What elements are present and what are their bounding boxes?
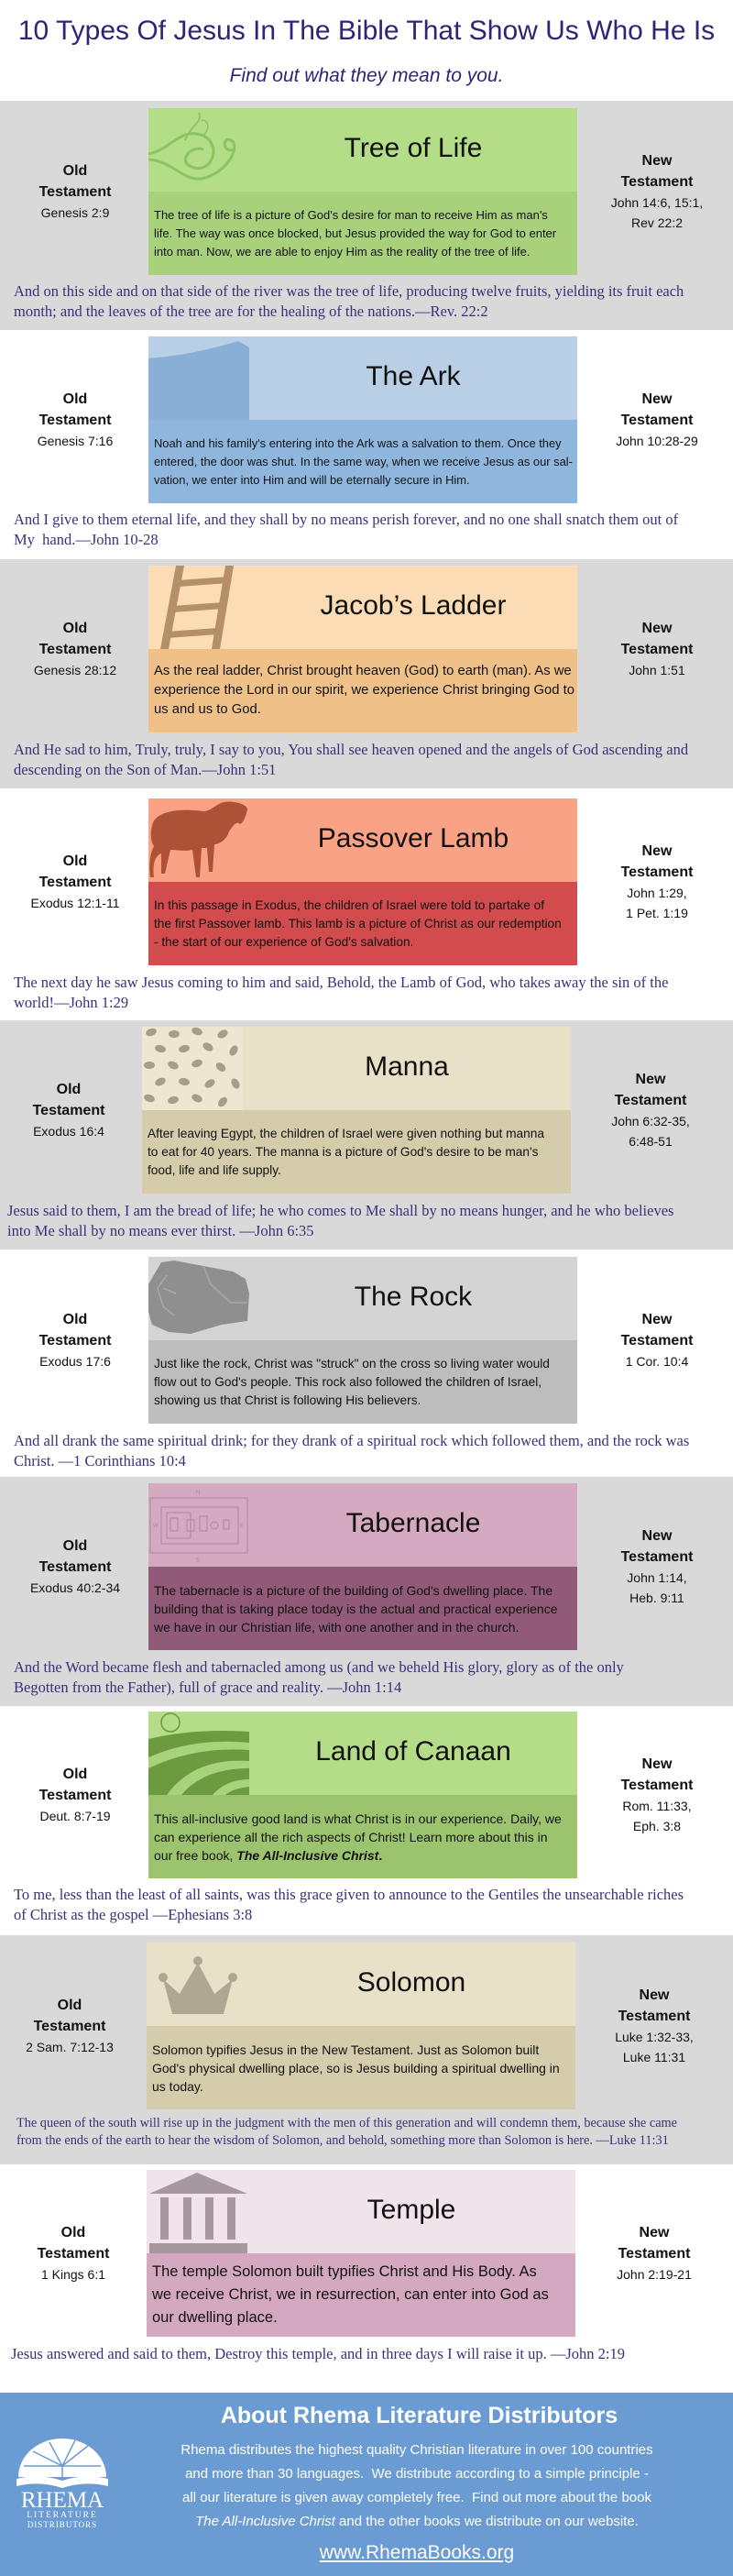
old testament label [38,391,113,448]
quote: Christ. —1 Corinthians 10:4 [14,1452,186,1470]
quote [14,282,684,320]
old testament label: Deut. 8:7-19 [39,1809,111,1823]
card: temple: our dwelling place. [152,2309,278,2326]
card: the rock: showing us that Christ is following His believers. [154,1393,421,1406]
card: the rock: flow out to God's people. This rock also followed the children of Israel, [154,1375,542,1388]
footer body text: all our literature is given away completely free. Find out more about the book [182,2490,651,2505]
card: the ark: entered, the door was shut. In the same way, when we receive Jesus as our sal- [154,455,573,468]
footer body text: The All-Inclusive Christ and the other books we distribute on our website. [195,2514,639,2529]
card: the ark [148,336,577,503]
card: tree of life: The tree of life is a picture of God's desire for man to receive Him as man's [154,207,548,222]
card: solomon: us today. [152,2079,203,2094]
old testament label: Genesis 7:16 [38,434,113,448]
icon: lamb [149,801,247,877]
old testament label: Testament [33,1103,104,1118]
card: tabernacle [148,1483,577,1650]
card: jacob's ladder: experience the Lord in our spirit, we experience Christ bringing God to [154,683,574,698]
card: the rock [148,1257,577,1424]
card: jacob's ladder [148,566,577,732]
card: tabernacle: building that is taking place today is the actual and practical experience [154,1601,557,1615]
icon: rock [148,1260,249,1334]
quote [14,1657,733,1698]
logo: rhema: LITERATURE [27,2511,98,2520]
footer: about rhema [0,2393,733,2576]
card: solomon: Solomon [357,1967,465,1997]
old testament label: Testament [39,1788,111,1803]
card: the rock: Just like the rock, Christ was "struck" on the cross so living water would [154,1357,550,1370]
old testament label [34,621,116,677]
card: temple: we receive Christ, we in resurrection, can enter into God as [152,2286,549,2303]
new testament label: Rev 22:2 [631,215,683,230]
panel: solomon [0,1943,733,2157]
old testament label: Old [63,1767,87,1782]
old testament label [30,1538,120,1595]
footer heading: About Rhema Literature Distributors [221,2403,618,2428]
card: jacob's ladder: Jacob’s Ladder [321,590,506,620]
new testament label: John 1:14, [627,1570,687,1585]
new testament label [621,621,693,677]
panel: passover lamb [14,798,693,1011]
card: the ark: vation, we enter into Him and will be eternally secure in Him. [154,473,470,486]
panel: temple [0,2170,733,2366]
new testament label [621,843,693,920]
quote: To me, less than the least of all saints, was this grace given to announce to the Gentiles the unsearchable riches [14,1886,684,1903]
icon: tabernacle diagram: N [196,1491,200,1496]
new testament label: New [642,843,672,859]
old testament label [0,1943,145,2109]
old testament label: Testament [39,1559,111,1575]
panel: land of canaan [0,1712,733,1926]
icon: temple [147,2170,247,2253]
new testament label: New [642,621,672,636]
card: tabernacle: we have in our Christian life, with one another and in the church. [154,1619,519,1634]
old testament label: Exodus 12:1-11 [30,896,120,910]
card: tree of life: into man. Now, we are able to enjoy Him as the reality of the tree of life. [154,244,530,259]
panel: the ark [14,336,698,548]
old testament label: Old [63,1312,87,1327]
old testament label: Testament [39,1333,111,1349]
card: land of canaan: This all-inclusive good land is what Christ is in our experience. Daily, we [154,1811,562,1826]
card: manna: After leaving Egypt, the children of Israel were given nothing but manna [148,1126,544,1140]
quote: Jesus said to them, I am the bread of life; he who comes to Me shall by no means hunger, and he who believes [7,1202,673,1219]
old testament label: Old [58,1998,82,2013]
card: tabernacle: Tabernacle [346,1507,480,1538]
icon: crown [147,1943,247,2026]
old testament label: Old [57,1082,81,1097]
quote: world!—John 1:29 [14,994,128,1011]
card: manna [142,1027,571,1194]
card: solomon: God's physical dwelling place, so is Jesus building a spiritual dwelling in [152,2061,560,2075]
footer body text [128,2438,706,2534]
new testament label: New [640,2225,669,2240]
icon: fields [148,1712,249,1795]
old testament label [33,1082,104,1139]
footer url: www.RhemaBooks.org [320,2542,514,2563]
old testament label: Old [61,2225,85,2240]
old testament label: Testament [39,413,111,428]
new testament label: John 10:28-29 [616,434,698,448]
card: solomon: Solomon typifies Jesus in the New Testament. Just as Solomon built [152,2042,539,2057]
old testament label: Testament [39,642,111,657]
card: passover lamb [148,798,577,965]
old testament label: Old [63,853,87,869]
new testament label: John 2:19-21 [617,2267,692,2282]
old testament label: Testament [38,2246,109,2262]
old testament label [38,163,112,220]
card: land of canaan: Land of Canaan [315,1736,511,1766]
quote: month; and the leaves of the tree are for the healing of the nations.—Rev. 22:2 [14,303,488,320]
new testament label: New [640,1987,669,2003]
quote [14,1885,733,1925]
new testament label: Luke 1:32-33, [615,2030,694,2044]
old testament label: Old [63,621,87,636]
old testament label: 2 Sam. 7:12-13 [26,2040,114,2054]
card: the ark: The Ark [366,361,461,391]
panel: the rock [14,1257,693,1470]
old testament label [0,1712,150,1878]
quote: descending on the Son of Man.—John 1:51 [14,761,276,778]
old testament label: Genesis 2:9 [41,205,109,220]
panel: manna [7,1027,690,1239]
new testament label: John 6:32-35, [611,1114,690,1128]
old testament label: 1 Kings 6:1 [41,2267,105,2282]
new testament label: Eph. 3:8 [633,1819,681,1833]
new testament label: Heb. 9:11 [629,1591,684,1605]
section backgrounds [0,101,733,330]
card: temple: The temple Solomon built typifies Christ and His Body. As [152,2263,537,2280]
quote: And all drank the same spiritual drink; for they drank of a spiritual rock which followed them, and the rock was [14,1432,689,1449]
quote: of Christ as the gospel —Ephesians 3:8 [14,1906,252,1923]
quote [7,1202,673,1239]
icon: vine [148,112,236,181]
new testament label: 1 Cor. 10:4 [626,1354,688,1369]
panel: jacob's ladder [14,566,693,778]
old testament label [30,853,120,910]
quote [14,741,688,778]
old testament label: Testament [39,184,111,200]
card: temple [147,2170,575,2337]
new testament label: Testament [621,864,693,880]
title: 10 Types Of Jesus In The Bible That Show Us Who He Is [18,16,715,46]
quote: The next day he saw Jesus coming to him and said, Behold, the Lamb of God, who takes away the sin of the [14,974,668,991]
card: temple: Temple [367,2195,455,2224]
card: passover lamb: the first Passover lamb. This lamb is a picture of Christ as our redemption [154,917,562,930]
icon: tabernacle diagram: W [153,1524,159,1529]
card: tree of life: life. The way was once blocked, but Jesus provided the way for God to enter [154,226,556,240]
old testament label: Genesis 28:12 [34,663,116,677]
old testament label: Old [63,163,87,179]
new testament label [579,2170,729,2337]
new testament label [611,153,703,230]
new testament label: New [642,153,672,169]
card: tree of life [148,108,577,275]
new testament label: New [642,1756,672,1772]
new testament label: Testament [621,413,693,428]
new testament label: John 1:51 [629,663,685,677]
quote: into Me shall by no means ever thirst. —John 6:35 [7,1222,314,1239]
subtitle: Find out what they mean to you. [230,65,503,86]
quote: Jesus answered and said to them, Destroy this temple, and in three days I will raise it up. —John 2:19 [11,2345,625,2362]
icon: ladder [160,566,234,649]
new testament label: Testament [615,1093,686,1108]
quote: Begotten from the Father), full of grace and reality. —John 1:14 [14,1679,401,1696]
quote: And the Word became flesh and tabernacled among us (and we beheld His glory, glory as of the only [14,1658,624,1676]
new testament label [579,1943,729,2109]
new testament label: New [642,391,672,407]
card: the rock: The Rock [355,1282,472,1311]
card: passover lamb: In this passage in Exodus, the children of Israel were told to partake of [154,898,544,911]
card: land of canaan: our free book, The All-Inclusive Christ. [154,1848,382,1863]
icon: tabernacle diagram: S [196,1558,200,1564]
quote [14,1432,689,1470]
icon: manna seeds [142,1027,243,1110]
new testament label: Luke 11:31 [623,2050,685,2064]
new testament label: 1 Pet. 1:19 [626,906,688,920]
old testament label: Testament [39,875,111,890]
new testament label: Testament [621,642,693,657]
icon: tabernacle diagram [150,1491,247,1564]
card: the ark: Noah and his family's entering into the Ark was a salvation to them. Once they [154,436,562,449]
old testament label: Old [63,1538,87,1554]
card: jacob's ladder: As the real ladder, Christ brought heaven (God) to earth (man). As we [154,664,572,678]
card: passover lamb: Passover Lamb [318,823,509,853]
new testament label: Testament [621,1778,693,1793]
old testament label: Exodus 40:2-34 [30,1580,120,1595]
new testament label: New [642,1312,672,1327]
quote: from the ends of the earth to hear the wisdom of Solomon, and behold, something more than Solomon is here. —Luke 11:31 [16,2133,669,2148]
new testament label: Rom. 11:33, [622,1799,692,1813]
card: jacob's ladder: us and us to God. [154,702,261,717]
card: solomon [147,1943,575,2109]
old testament label: Old [63,391,87,407]
panel: tabernacle [14,1483,693,1696]
card: manna: Manna [365,1051,449,1082]
new testament label: Testament [621,1549,693,1565]
panel: tree of life [14,108,703,320]
quote: And on this side and on that side of the river was the tree of life, producing twelve fruits, yielding its fruit each [14,282,684,300]
new testament label [616,391,698,448]
new testament label: New [642,1528,672,1544]
old testament label [0,2170,148,2337]
new testament label: Testament [621,1333,693,1349]
card: passover lamb: - the start of our experience of God's salvation. [154,935,413,948]
new testament label [582,1712,732,1878]
quote [14,974,668,1011]
new testament label [611,1072,690,1149]
new testament label: 6:48-51 [629,1134,673,1149]
card: tree of life: Tree of Life [345,132,482,163]
card: land of canaan: can experience all the rich aspects of Christ! Learn more about this in [154,1830,548,1844]
card: manna: food, life and life supply. [148,1162,281,1177]
old testament label [38,1312,112,1369]
quote [14,511,678,548]
quote: And He sad to him, Truly, truly, I say to you, You shall see heaven opened and the angels of God ascending and [14,741,688,758]
old testament label: Testament [34,2019,105,2034]
logo: rhema: RHEMA [21,2488,104,2513]
card: land of canaan [148,1712,577,1878]
new testament label [621,1312,693,1369]
logo: rhema [15,2438,110,2530]
new testament label: John 1:29, [627,886,687,900]
quote: My hand.—John 10-28 [14,531,159,548]
icon: ark [148,341,249,420]
new testament label [582,1483,732,1650]
new testament label: Testament [618,2246,690,2262]
footer body text: Rhema distributes the highest quality Christian literature in over 100 countries [181,2442,653,2458]
quote [16,2115,733,2150]
new testament label: John 14:6, 15:1, [611,195,703,210]
footer body text: and more than 30 languages. We distribute according to a simple principle - [185,2466,649,2482]
quote: And I give to them eternal life, and they shall by no means perish forever, and no one shall snatch them out of [14,511,678,528]
new testament label: Testament [618,2009,690,2024]
new testament label: Testament [621,174,693,190]
old testament label: Exodus 17:6 [39,1354,111,1369]
quote: The queen of the south will rise up in the judgment with the men of this generation and will condemn them, because she came [16,2116,677,2130]
card: tabernacle: The tabernacle is a picture of the building of God's dwelling place. The [154,1582,552,1597]
card: manna: to eat for 40 years. The manna is a picture of God's desire to be man's [148,1144,538,1159]
icon: tabernacle diagram: E [240,1524,244,1529]
old testament label: Exodus 16:4 [33,1124,104,1139]
new testament label: New [636,1072,665,1087]
logo: rhema: DISTRIBUTORS [27,2520,97,2529]
